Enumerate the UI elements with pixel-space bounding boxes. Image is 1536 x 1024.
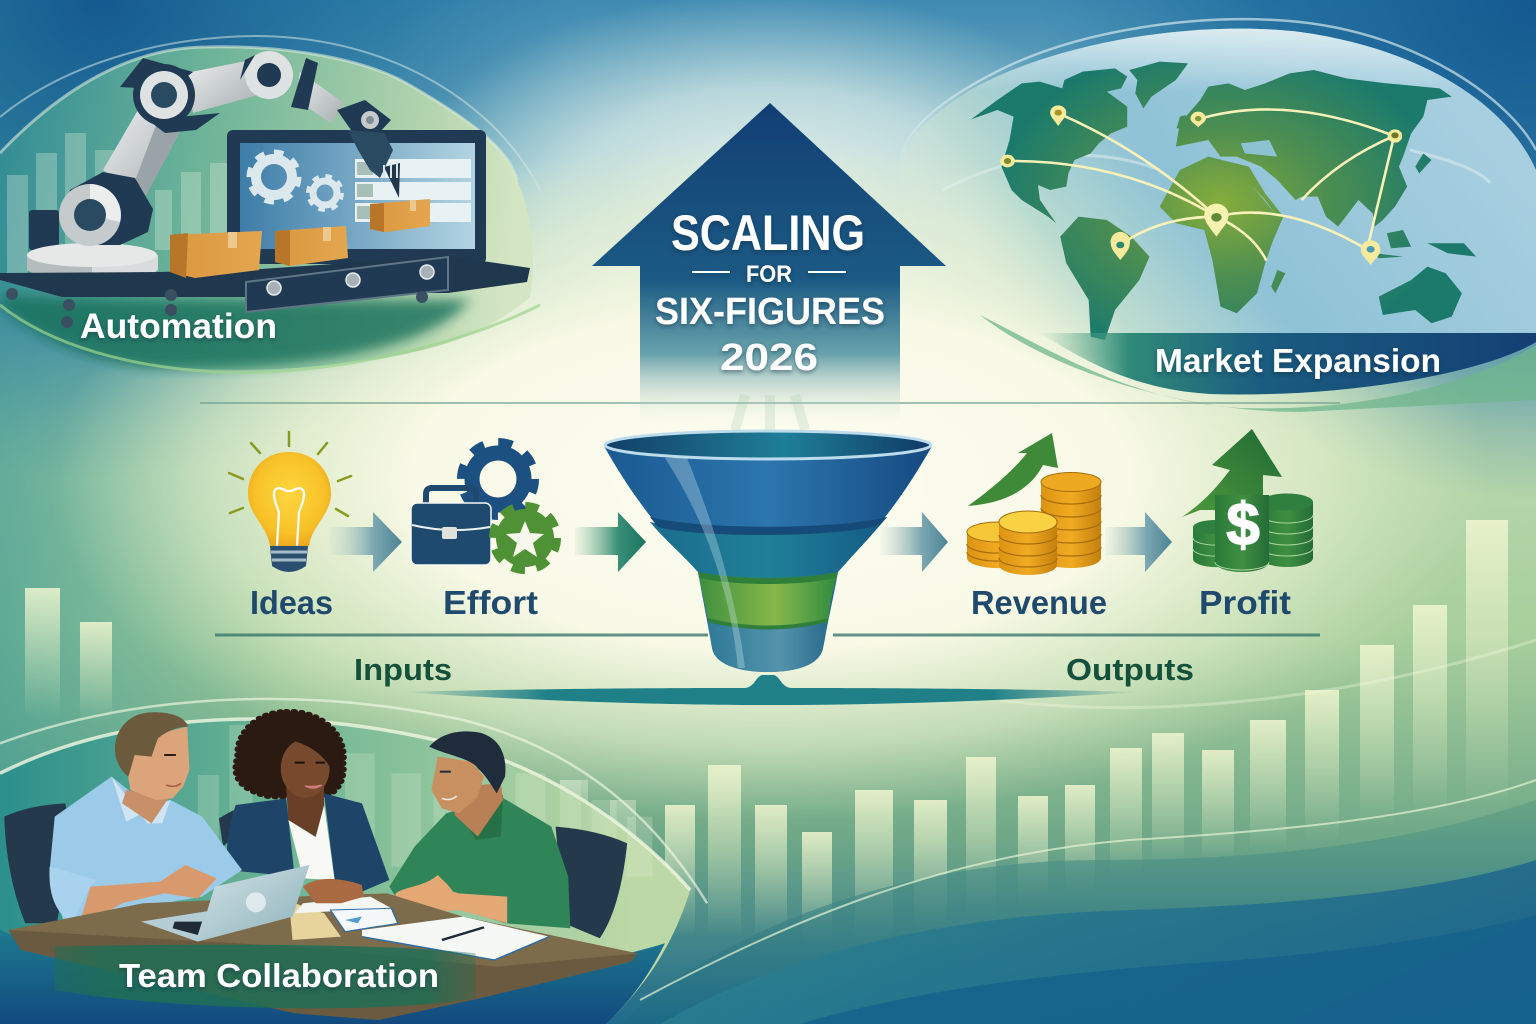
chairs [4, 803, 627, 938]
heading: team collaboration: Team Collaboration [119, 957, 439, 994]
icon: blue gear [462, 443, 534, 515]
title text: 2026 [720, 337, 818, 379]
lower arm [103, 110, 181, 197]
funnel rim [605, 431, 931, 459]
icon: revenue coins [967, 433, 1101, 575]
funnel band: green [698, 572, 838, 628]
arrow: revenue to profit [1105, 512, 1172, 572]
panel: team collaboration [0, 699, 707, 1024]
icon: gear small [308, 176, 342, 210]
bar chart: left background [25, 588, 112, 722]
coin stack: short [967, 522, 1030, 568]
underlines for inputs and outputs [215, 634, 1320, 636]
heading: market expansion: Market Expansion [1155, 342, 1441, 379]
hands over laptop [303, 883, 364, 903]
upper arm [148, 60, 258, 133]
icon: profit [1182, 429, 1313, 572]
shoulder joint [240, 51, 318, 110]
box two [275, 226, 348, 266]
icon: green star gear [494, 507, 556, 569]
coin stack: middle [999, 511, 1057, 575]
person: woman [227, 712, 389, 903]
screen form fields [355, 159, 471, 222]
forearm [296, 72, 344, 123]
bar chart: automation backdrop [7, 133, 227, 275]
bar chart: rising background bars [560, 520, 1508, 942]
map pins [1000, 105, 1402, 265]
arrow: ideas to effort [330, 512, 402, 572]
boxes [170, 199, 430, 278]
world map [971, 62, 1476, 340]
base band under funnel [400, 675, 1140, 705]
title text: SIX-FIGURES [655, 291, 885, 333]
box one [170, 231, 262, 278]
heading: automation: Automation [80, 307, 277, 346]
funnel stripe [650, 517, 887, 535]
label: ideas: Ideas [250, 584, 333, 621]
funnel highlight [665, 458, 745, 668]
arrow: effort to funnel [575, 512, 646, 572]
lower joint [59, 172, 153, 246]
decorative waves: bottom right [620, 640, 1536, 1024]
label: outputs: Outputs [1066, 652, 1194, 687]
label: effort: Effort [443, 584, 538, 621]
funnel band: teal [650, 517, 887, 578]
funnel [604, 431, 932, 672]
monitor [227, 130, 486, 264]
inland water [1241, 140, 1277, 217]
person: right man [389, 731, 570, 928]
laptop [141, 865, 309, 942]
dollar sign: $ [1226, 491, 1260, 558]
bulb rays [229, 432, 351, 516]
title text: FOR [746, 261, 792, 288]
arm base [27, 210, 158, 280]
table [8, 893, 638, 1020]
title arrow [592, 103, 946, 430]
green swoosh under map [980, 315, 1536, 412]
route lines [1008, 109, 1394, 261]
icon: briefcase [411, 488, 491, 565]
label: revenue: Revenue [971, 584, 1107, 621]
coin stack: centre [1215, 495, 1269, 572]
icon: gear large [250, 153, 298, 201]
coin stack: left [1193, 520, 1240, 567]
title text [655, 205, 885, 379]
separator lines [200, 402, 1340, 404]
funnel band: spout [708, 622, 828, 672]
icon: light bulb [229, 432, 351, 572]
conveyor [0, 256, 530, 328]
coin stack: tall [1041, 472, 1101, 568]
person: left man [49, 712, 242, 925]
bar chart: team backdrop [198, 725, 652, 877]
arrow: funnel to revenue [880, 512, 948, 572]
elbow joint [120, 58, 195, 126]
icon: rising arrow [968, 433, 1058, 506]
icon: briefcase and gears [411, 443, 556, 569]
panel fill [0, 719, 690, 1024]
panel: market expansion [899, 19, 1536, 412]
title text: SCALING [671, 205, 865, 261]
coin stack: right [1261, 494, 1313, 567]
label: profit: Profit [1199, 584, 1291, 621]
gripper [337, 100, 400, 198]
label band [1040, 333, 1536, 394]
label band [55, 945, 476, 1008]
panel: automation [0, 36, 540, 372]
papers and notebook [290, 897, 549, 960]
navy floor [0, 930, 665, 1024]
box three [370, 199, 430, 232]
icon: up arrow [1182, 429, 1282, 517]
label: inputs: Inputs [354, 652, 452, 687]
robot arm [27, 51, 400, 280]
green glow: automation floor [0, 296, 470, 368]
